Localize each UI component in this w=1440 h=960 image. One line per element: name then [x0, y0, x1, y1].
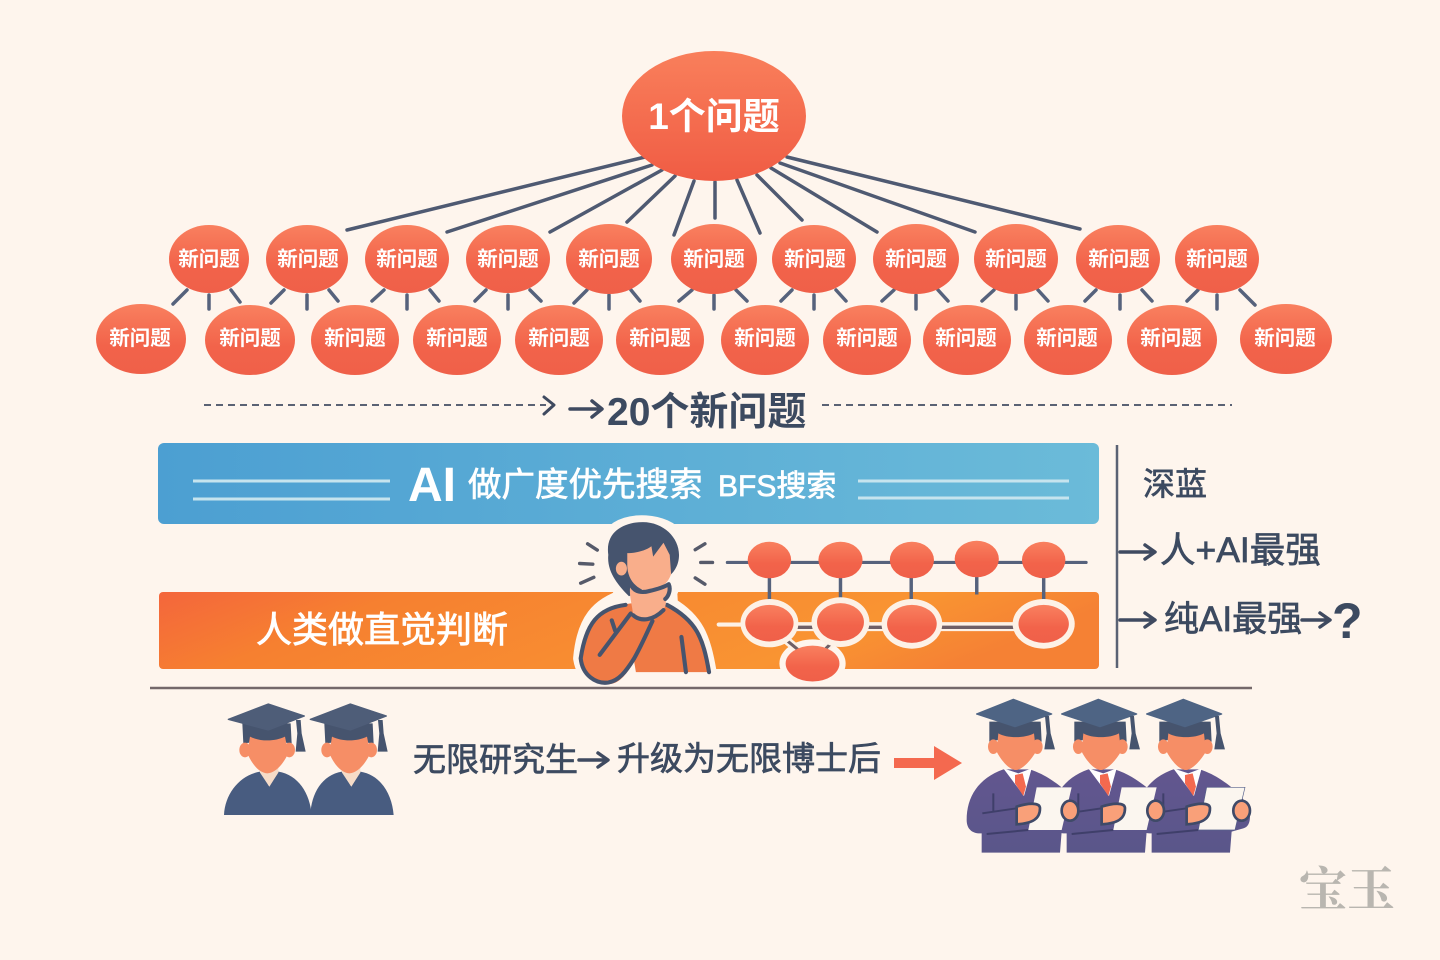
graduate students icon pair: [224, 704, 394, 815]
row 2: new question bubbles: 新问题: [1140, 326, 1202, 350]
upgrade sentence: 升级为无限博士后: [617, 740, 881, 777]
dashed arrow with 20 new questions heading: 20个新问题: [607, 391, 806, 434]
postdoc right: [1137, 699, 1250, 853]
row 1: new question bubbles: 新问题: [683, 247, 745, 271]
postdoc left: [967, 699, 1080, 853]
red arrow: [894, 746, 962, 780]
row 1: new question bubbles: 新问题: [1186, 247, 1248, 271]
row 1: new question bubbles: 新问题: [477, 247, 539, 271]
row 1: new question bubbles: 新问题: [985, 247, 1047, 271]
graduate student left: [224, 704, 312, 815]
row 2: new question bubbles: 新问题: [1254, 326, 1316, 350]
upgrade sentence: [413, 740, 881, 778]
root question bubble: 1个问题: [648, 96, 780, 137]
label: pure AI strongest, question mark: ?: [1332, 593, 1363, 649]
row 2: new question bubbles: [96, 304, 1332, 375]
row 1: new question bubbles: 新问题: [277, 247, 339, 271]
postdoc middle: [1052, 699, 1165, 853]
row 2: new question bubbles: 新问题: [734, 326, 796, 350]
thinking person icon: [560, 522, 722, 686]
blue banner: AI breadth-first search: 做广度优先搜索: [468, 467, 702, 504]
row 2: new question bubbles: 新问题: [935, 326, 997, 350]
row 1: new question bubbles: 新问题: [885, 247, 947, 271]
watermark: 宝玉: [1299, 864, 1395, 917]
row 1: new question bubbles: [169, 224, 1259, 294]
thinking marks around head: [580, 544, 712, 584]
row 2: new question bubbles: 新问题: [426, 326, 488, 350]
row 1: new question bubbles: 新问题: [784, 247, 846, 271]
blue banner: AI breadth-first search: BFS搜索: [718, 470, 836, 503]
row 2: new question bubbles: 新问题: [324, 326, 386, 350]
spokes between the two bubble rows: [173, 290, 1255, 309]
root question bubble: [622, 51, 806, 181]
label: pure AI strongest, question mark: [1120, 593, 1363, 649]
row 2: new question bubbles: 新问题: [836, 326, 898, 350]
section divider: [150, 687, 1252, 689]
node network: upper row: [727, 541, 1086, 600]
label: pure AI strongest, question mark: 纯AI最强: [1164, 600, 1302, 639]
blue banner: AI breadth-first search: AI: [408, 459, 456, 512]
row 1: new question bubbles: 新问题: [578, 247, 640, 271]
row 2: new question bubbles: 新问题: [629, 326, 691, 350]
row 2: new question bubbles: 新问题: [1036, 326, 1098, 350]
row 1: new question bubbles: 新问题: [178, 247, 240, 271]
label: deep blue: 深蓝: [1143, 466, 1207, 502]
dashed arrow with 20 new questions heading: [204, 391, 1232, 434]
row 1: new question bubbles: 新问题: [376, 247, 438, 271]
row 1: new question bubbles: 新问题: [1088, 247, 1150, 271]
graduate student right: [310, 704, 394, 815]
row 2: new question bubbles: 新问题: [219, 326, 281, 350]
label: human plus AI strongest: 人+AI最强: [1160, 530, 1321, 570]
blue banner: AI breadth-first search: [158, 443, 1099, 524]
vertical divider: [1116, 445, 1118, 668]
connector rays from root question to new questions: [347, 157, 1080, 235]
postdoc researchers icon group: [967, 699, 1250, 853]
orange banner: human intuition: [159, 592, 1099, 669]
row 2: new question bubbles: 新问题: [528, 326, 590, 350]
row 2: new question bubbles: 新问题: [109, 326, 171, 350]
node network: lower row on orange banner: [719, 597, 1075, 688]
upgrade sentence: 无限研究生: [413, 741, 578, 778]
orange banner: human intuition: 人类做直觉判断: [256, 609, 508, 650]
